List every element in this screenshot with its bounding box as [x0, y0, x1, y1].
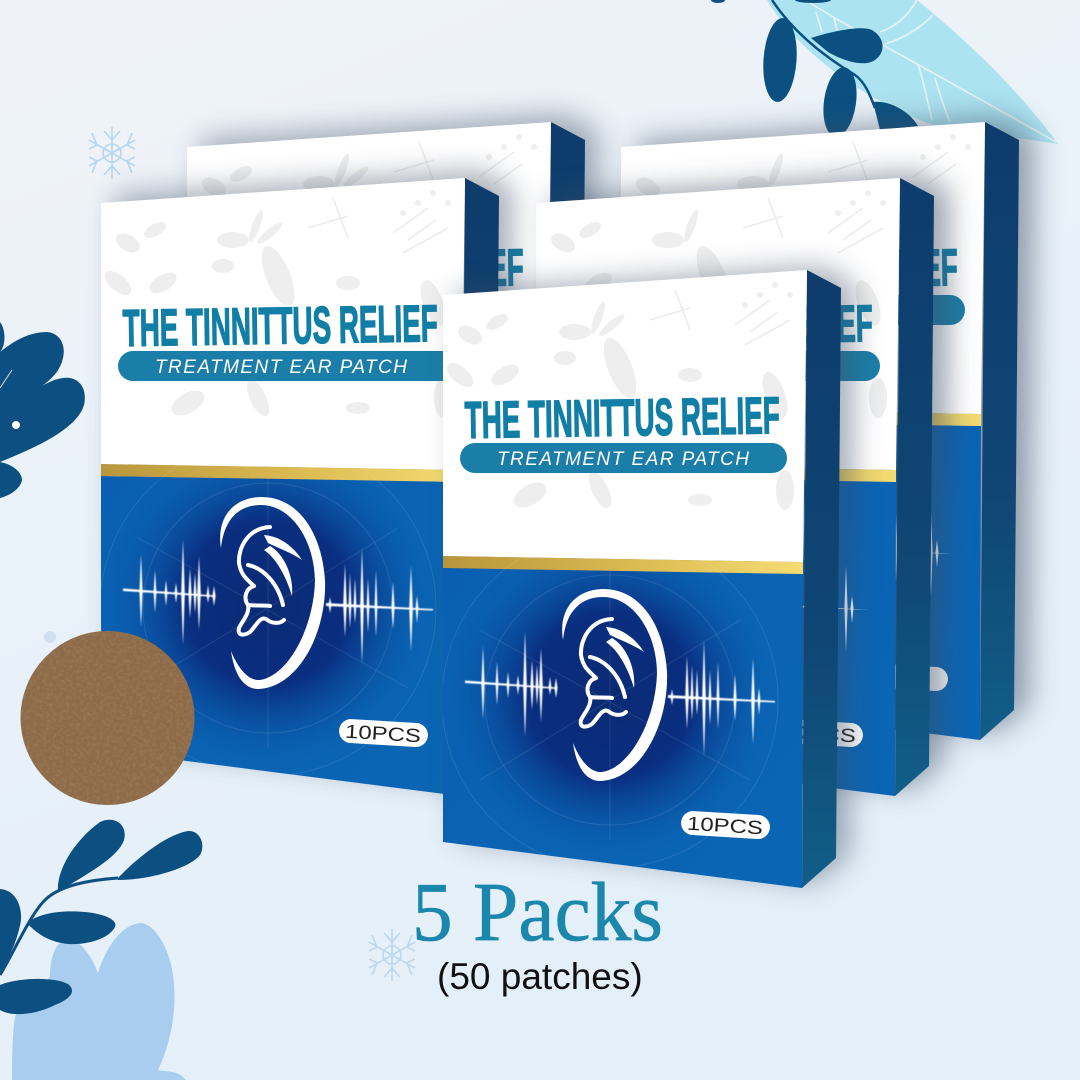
- box side: [802, 270, 841, 888]
- white panel: [101, 178, 465, 470]
- product box: back right: [621, 116, 1035, 740]
- leaf sprig: top right dark blue: [711, 0, 918, 139]
- gold band: [101, 464, 461, 482]
- icon: snowflake top left: [89, 127, 135, 179]
- subheading: 50 patches: (50 patches): [437, 956, 643, 997]
- subtitle pill: TREATMENT EAR PATCH: [497, 449, 749, 470]
- leaf: left dark blue cluster: [0, 322, 85, 498]
- icon: snowflake bottom: [369, 929, 415, 981]
- white panel: [443, 270, 807, 562]
- 10PCS badge: [338, 718, 429, 748]
- subtitle pill: TREATMENT EAR PATCH: [155, 357, 407, 378]
- leaf: top right light blue: [767, 0, 1058, 144]
- title: THE TINNITTUS RELIEF: [122, 295, 438, 358]
- blue panel: [101, 476, 461, 796]
- product box: middle right: [536, 172, 950, 796]
- leaf: bottom left light blue plant: [12, 923, 186, 1080]
- ear illustration: [443, 558, 778, 866]
- gold band: [443, 556, 803, 574]
- leaf sprig: bottom left dark blue: [0, 820, 202, 1014]
- product box: back left: [187, 114, 599, 740]
- title: THE TINNITTUS RELIEF: [464, 387, 780, 450]
- floral pattern: [443, 282, 805, 562]
- 10PCS badge: 10PCS: [686, 814, 763, 839]
- 10PCS badge: 10PCS: [344, 722, 421, 747]
- subtitle pill: [118, 351, 458, 381]
- product box: front center: [442, 266, 855, 888]
- blue panel: [443, 568, 803, 888]
- box side: [460, 178, 499, 796]
- product box: front left: [100, 170, 513, 796]
- 10PCS badge: [680, 810, 771, 840]
- floral pattern: [101, 190, 463, 470]
- subtitle pill: [460, 443, 787, 473]
- product box: back left: THE TINNITTUS RELIEF: [208, 239, 524, 302]
- heading: 5 Packs: 5 Packs: [412, 866, 663, 959]
- ear patch sample: [20, 631, 194, 805]
- dot beside patch: [44, 631, 56, 643]
- ear illustration: [101, 466, 436, 774]
- product box: middle right: 10PCS: [779, 722, 856, 747]
